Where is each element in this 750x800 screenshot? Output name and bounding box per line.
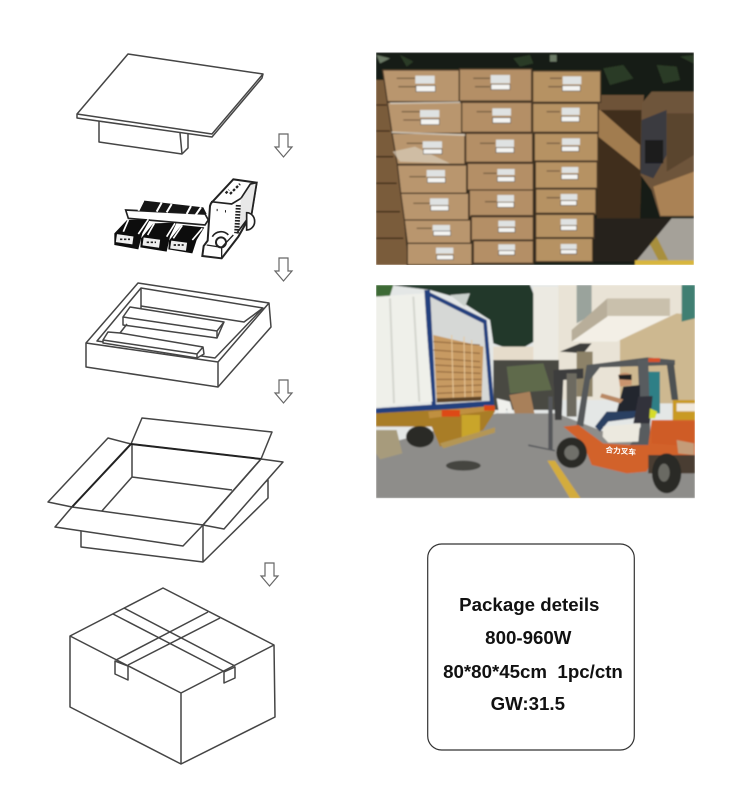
illustration: foam tray [86, 283, 271, 387]
panel: package details [428, 544, 634, 750]
arrow: down 3 [275, 380, 292, 403]
text: gross weight: GW:31.5 [491, 693, 565, 714]
arrow: down 2 [275, 258, 292, 281]
illustration: foam lid [77, 54, 263, 154]
photo: stacked cartons on pallet [376, 52, 694, 265]
text: carton size: 80*80*45cm 1pc/ctn [443, 661, 623, 682]
heading: package details: Package deteils [459, 594, 599, 615]
arrow: down 1 [275, 134, 292, 157]
text: wattage: 800-960W [485, 627, 572, 648]
illustration: sealed carton [70, 588, 275, 764]
illustration: open carton [48, 418, 283, 562]
photo: loading container with forklift [376, 285, 695, 498]
arrow: down 4 [261, 563, 278, 586]
illustration: inverter with connectors [114, 179, 257, 258]
forklift lettering: 合力叉车 [605, 444, 637, 457]
